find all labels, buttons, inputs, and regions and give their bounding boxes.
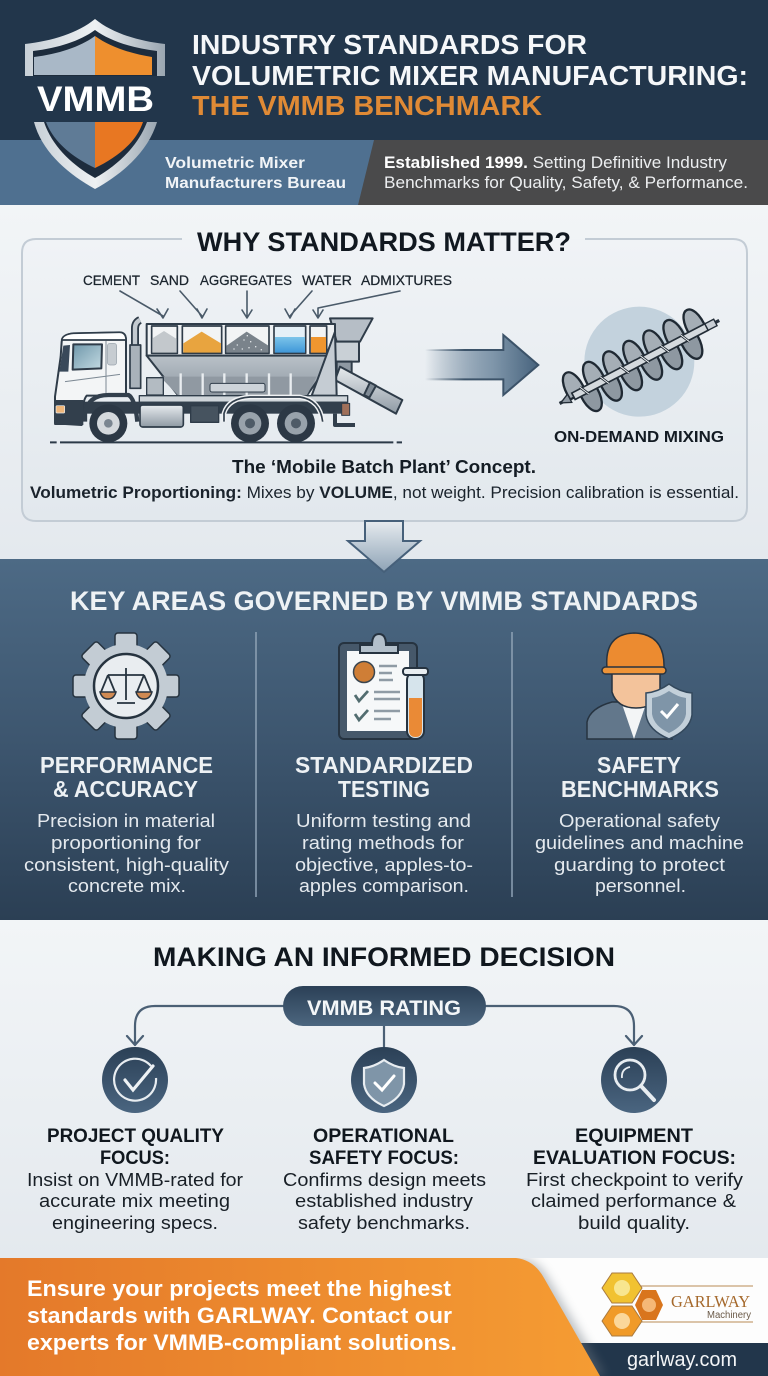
fenders: [85, 395, 137, 422]
description: established industry: [295, 1191, 473, 1211]
icon: magnifier: [601, 1047, 667, 1113]
icon: mixing auger: [548, 299, 730, 425]
description: engineering specs.: [52, 1213, 218, 1233]
description: [526, 1170, 743, 1233]
label: on-demand mixing: ON-DEMAND MIXING: [554, 429, 724, 446]
hopper body: [147, 324, 337, 396]
chassis: [139, 396, 348, 402]
heading: [47, 1125, 224, 1169]
material labels: ADMIXTURES: [361, 272, 452, 288]
heading: [40, 752, 213, 802]
arrow: truck to auger: [425, 335, 538, 395]
description: accurate mix meeting: [39, 1191, 230, 1211]
heading: EVALUATION FOCUS:: [533, 1147, 736, 1169]
description: Uniform testing and: [296, 810, 471, 831]
wheels: [89, 404, 315, 442]
subtitle strip: organisation name: Volumetric Mixer: [165, 155, 305, 172]
icon: VMMB shield logo: [25, 19, 165, 189]
discharge chute: [330, 318, 402, 414]
description: [27, 1170, 243, 1233]
heading: PROJECT QUALITY: [47, 1125, 224, 1147]
column: project quality focus: [27, 1047, 243, 1233]
description: claimed performance &: [531, 1191, 736, 1211]
description: Confirms design meets: [283, 1170, 486, 1190]
logo: garlway machinery: GARLWAY: [671, 1292, 750, 1311]
description: [295, 810, 473, 896]
logo: garlway machinery: [602, 1273, 753, 1336]
call to action: experts for VMMB-compliant solutions.: [27, 1330, 457, 1355]
subtitle strip: established note: Benchmarks for Quality, Safety, & Performance.: [384, 174, 748, 192]
icon: worker with hard hat and shield: [587, 633, 692, 739]
description: Precision in material: [37, 810, 215, 831]
footer: [0, 1258, 768, 1376]
description: guidelines and machine: [535, 832, 744, 853]
icon: shield check: [351, 1047, 417, 1113]
badge: VMMB rating: [283, 986, 486, 1026]
column: operational safety focus: [283, 1047, 486, 1233]
heading: PERFORMANCE: [40, 752, 213, 778]
column: equipment evaluation focus: [526, 1047, 743, 1233]
description: [535, 810, 744, 896]
heading: FOCUS:: [100, 1147, 170, 1169]
material labels: WATER: [302, 272, 352, 288]
material labels: AGGREGATES: [200, 272, 292, 288]
description: Insist on VMMB-rated for: [27, 1170, 243, 1190]
icon: check circle: [102, 1047, 168, 1113]
title: VOLUMETRIC MIXER MANUFACTURING:: [192, 60, 748, 91]
heading: [561, 752, 719, 802]
material labels: CEMENT: [83, 272, 140, 288]
section: making an informed decision: [0, 920, 768, 1258]
title: THE VMMB BENCHMARK: [192, 90, 542, 121]
title: [192, 29, 748, 121]
subtitle strip: established note: [358, 140, 768, 205]
heading: [309, 1125, 459, 1169]
title: INDUSTRY STANDARDS FOR: [192, 29, 587, 60]
illustration: volumetric mixer truck: [50, 318, 402, 442]
heading: OPERATIONAL: [313, 1125, 454, 1147]
description: apples comparison.: [299, 875, 469, 896]
description: personnel.: [595, 875, 686, 896]
call to action: Ensure your projects meet the highest: [27, 1276, 452, 1301]
description: [283, 1170, 486, 1233]
heading: SAFETY: [597, 752, 681, 778]
heading: EQUIPMENT: [575, 1125, 693, 1147]
text: mobile batch plant concept: The ‘Mobile Batch Plant’ Concept.: [232, 457, 536, 477]
card: standardized testing: [295, 634, 473, 896]
heading: why standards matter: WHY STANDARDS MATTER?: [197, 227, 571, 257]
subtitle strip: organisation name: [0, 140, 376, 205]
compartments: [152, 326, 327, 353]
description: guarding to protect: [554, 854, 725, 875]
page background: why standards section: [0, 205, 768, 559]
icon: VMMB shield logo: VMMB: [37, 80, 154, 119]
heading: [295, 752, 473, 802]
panel: why standards matter: [22, 227, 747, 521]
text: volumetric proportioning: Volumetric Proportioning: Mixes by VOLUME, not weight. Precision calibration is essential.: [30, 483, 739, 502]
subtitle strip: organisation name: Manufacturers Bureau: [165, 175, 346, 192]
heading: informed decision: MAKING AN INFORMED DECISION: [153, 942, 615, 972]
heading: TESTING: [338, 776, 430, 802]
header band: [0, 0, 768, 205]
description: concrete mix.: [68, 875, 186, 896]
arrow: down to key areas: [348, 521, 420, 572]
subtitle strip: established note: Established 1999. Setting Definitive Industry: [384, 154, 728, 172]
connectors from rating pill: [127, 1006, 642, 1050]
heading: [533, 1125, 736, 1169]
description: rating methods for: [302, 832, 464, 853]
icon: clipboard and test tube: [339, 634, 428, 739]
heading: BENCHMARKS: [561, 776, 719, 802]
section: key areas governed: [0, 521, 768, 920]
icon: gear with scales: [73, 633, 179, 739]
card: safety benchmarks: [535, 633, 744, 896]
material labels: [83, 272, 452, 288]
logo: garlway machinery: Machinery: [707, 1310, 751, 1321]
call to action: standards with GARLWAY. Contact our: [27, 1303, 452, 1328]
url strip: [575, 1343, 768, 1376]
description: First checkpoint to verify: [526, 1170, 743, 1190]
description: build quality.: [578, 1213, 690, 1233]
heading: & ACCURACY: [53, 776, 198, 802]
description: consistent, high-quality: [24, 854, 230, 875]
heading: SAFETY FOCUS:: [309, 1147, 459, 1169]
description: objective, apples-to-: [295, 854, 473, 875]
description: proportioning for: [51, 832, 201, 853]
description: [24, 810, 230, 896]
material arrows: [120, 291, 400, 318]
url strip: garlway.com: [627, 1349, 737, 1371]
cab: [55, 332, 126, 425]
description: safety benchmarks.: [298, 1213, 470, 1233]
exhaust: [135, 320, 140, 388]
material labels: SAND: [150, 272, 189, 288]
badge: VMMB rating: VMMB RATING: [307, 997, 461, 1020]
call to action: [0, 1258, 606, 1376]
card: performance and accuracy: [24, 633, 230, 896]
heading: key areas: KEY AREAS GOVERNED BY VMMB STANDARDS: [70, 586, 698, 616]
description: Operational safety: [559, 810, 721, 831]
heading: STANDARDIZED: [295, 752, 473, 778]
